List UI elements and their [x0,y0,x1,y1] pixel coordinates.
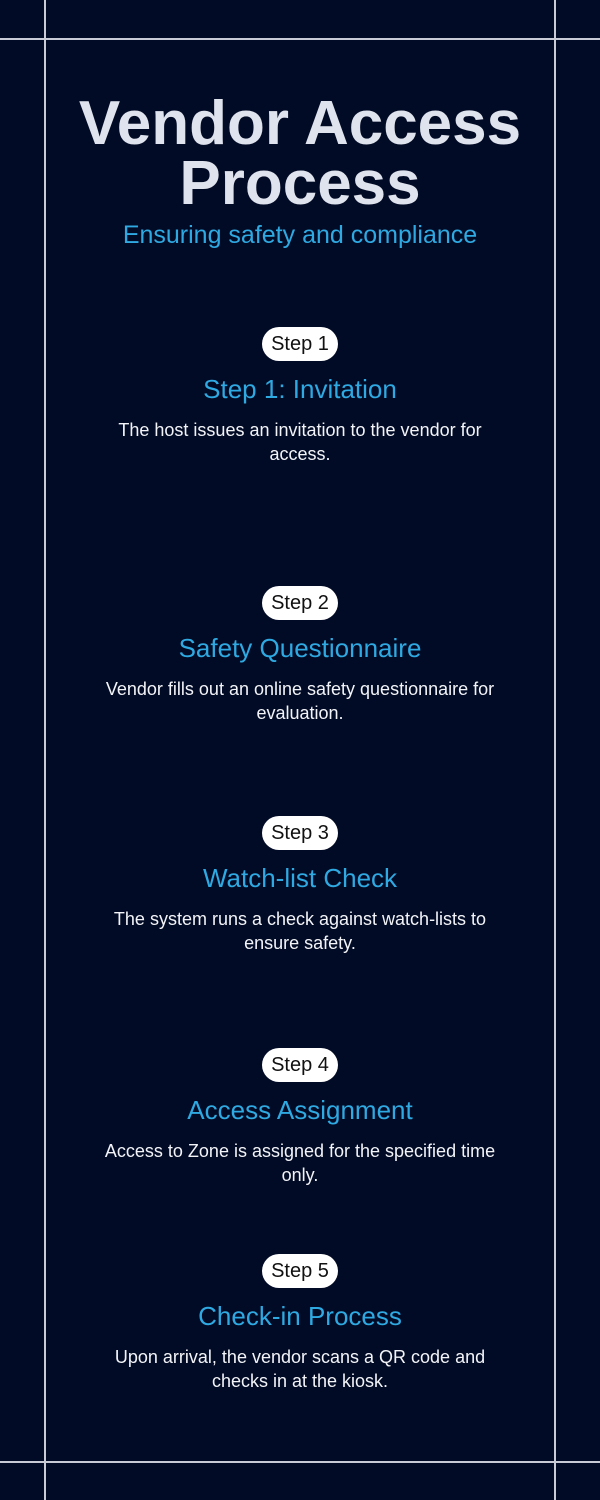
subtitle: Ensuring safety and compliance [123,221,477,249]
title: Vendor Access [79,89,521,158]
badge: step 1 [262,327,338,361]
description: check-in process: Upon arrival, the vendor scans a QR code and [115,1347,485,1367]
heading: watch-list check: Watch-list Check [203,863,397,893]
description: invitation [118,420,482,464]
step 4 [104,1048,495,1185]
badge: step 3: Step 3 [271,822,329,844]
badge: step 2: Step 2 [271,592,329,614]
step 1 [118,327,482,464]
badge: step 5: Step 5 [271,1260,329,1282]
description: check-in process: checks in at the kiosk. [212,1371,388,1391]
description: watch-list check: The system runs a check against watch-lists to [114,909,486,929]
description: watch-list check [114,909,486,953]
step 5 [115,1254,485,1391]
description: watch-list check: ensure safety. [244,933,356,953]
heading: check-in process: Check-in Process [198,1301,402,1331]
description: safety questionnaire: evaluation. [256,703,344,723]
title: Process [179,149,421,218]
description: invitation: access. [269,444,331,464]
badge: step 3 [262,816,338,850]
heading: safety questionnaire: Safety Questionnaire [179,633,421,663]
description: access assignment: Access to Zone is assigned for the specified time [105,1141,495,1161]
description: safety questionnaire [106,679,494,723]
badge: step 4: Step 4 [271,1054,329,1076]
title [79,89,521,218]
step 2 [106,586,494,723]
description: access assignment [104,1141,495,1185]
badge: step 4 [262,1048,338,1082]
description: check-in process [115,1347,485,1391]
step 3 [114,816,486,953]
description: access assignment: only. [282,1165,318,1185]
badge: step 1: Step 1 [271,333,329,355]
description: safety questionnaire: Vendor fills out an online safety questionnaire for [106,679,494,699]
heading: invitation: Step 1: Invitation [203,374,397,404]
heading: access assignment: Access Assignment [187,1095,413,1125]
badge: step 5 [262,1254,338,1288]
badge: step 2 [262,586,338,620]
description: invitation: The host issues an invitation to the vendor for [118,420,482,440]
